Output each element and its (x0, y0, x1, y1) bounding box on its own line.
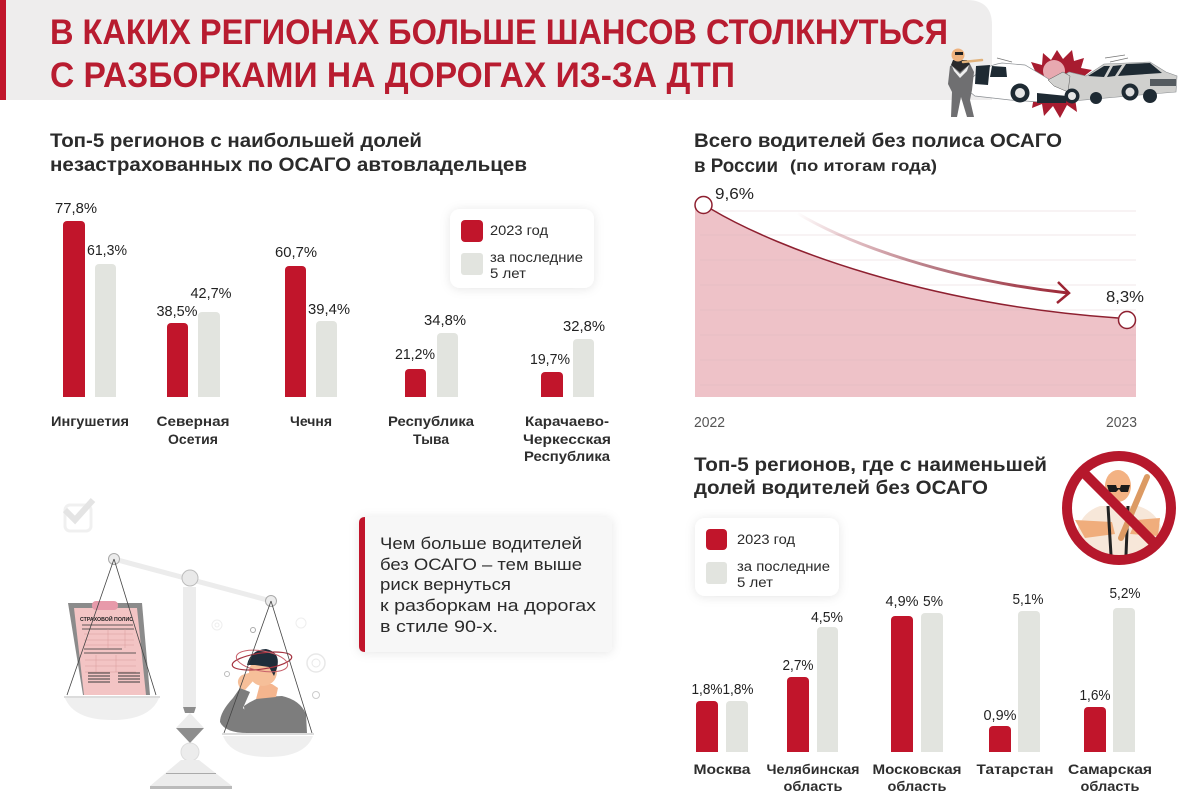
start point (695, 186, 754, 214)
area chart: 2023 (1106, 415, 1137, 431)
area chart (694, 186, 1144, 431)
right pan (222, 601, 314, 757)
legend: bottom chart: 2023 год (737, 532, 795, 547)
bars: Челябинская область: 2,7% (782, 658, 814, 674)
legend: top chart: 2023 год (490, 223, 548, 238)
heading: top-5 highest: Топ-5 регионов с наибольшей долей (50, 131, 422, 152)
bars: Московская область (872, 594, 962, 794)
heading: total drivers (694, 131, 1062, 177)
left pan (64, 559, 160, 720)
bars: Северная Осетия: Осетия (168, 431, 218, 447)
trend arrow (797, 213, 1069, 303)
bars: Самарская область: 5,2% (1110, 586, 1141, 602)
bars: Москва: Москва (694, 761, 751, 777)
header banner (0, 0, 992, 100)
bars: Челябинская область: Челябинская (766, 761, 860, 777)
bars: Самарская область: Самарская (1068, 761, 1152, 777)
bars: Республика Тыва: Республика (388, 413, 474, 429)
end point: 8,3% (1106, 289, 1144, 306)
legend: top chart: за последние (490, 250, 583, 265)
scales stand (108, 554, 276, 789)
bars: Северная Осетия: 38,5% (156, 304, 198, 320)
bars: Республика Тыва: 34,8% (424, 313, 466, 329)
bars: Ингушетия (51, 201, 129, 429)
bars: Самарская область (1068, 586, 1152, 794)
callout (359, 517, 612, 652)
bars: Москва: 1,8% (692, 682, 723, 698)
icon: prohibited bandit (1067, 456, 1171, 560)
man with bat (948, 48, 982, 117)
title: С РАЗБОРКАМИ НА ДОРОГАХ ИЗ-ЗА ДТП (50, 56, 735, 95)
area chart: 2022 (694, 415, 725, 431)
dizzy man (212, 618, 325, 733)
bars: Татарстан: Татарстан (976, 761, 1054, 777)
bars: Ингушетия: 77,8% (55, 201, 97, 217)
bars: Северная Осетия (156, 286, 232, 447)
callout: к разборкам на дорогах (380, 596, 597, 615)
callout: без ОСАГО – тем выше (380, 555, 582, 574)
bars: Самарская область: область (1080, 778, 1140, 794)
callout: риск вернуться (380, 575, 511, 594)
bars: Республика Тыва (388, 313, 474, 447)
bars: Карачаево-Черкесская Республика: 32,8% (563, 319, 605, 335)
bars: Карачаево-Черкесская Республика (523, 319, 611, 464)
heading: top-5 lowest: долей водителей без ОСАГО (694, 478, 988, 499)
bars: Чечня (275, 245, 350, 429)
bars: Московская область: 4,9% (886, 594, 919, 610)
title (50, 13, 948, 95)
heading: total drivers: (по итогам года) (790, 158, 937, 175)
bars: Самарская область: 1,6% (1080, 688, 1111, 704)
heading: top-5 lowest (694, 455, 1047, 499)
heading: top-5 highest (50, 131, 527, 176)
bars: Ингушетия: Ингушетия (51, 413, 129, 429)
bars: Республика Тыва: 21,2% (395, 347, 435, 363)
bars: Карачаево-Черкесская Республика: 19,7% (530, 352, 570, 368)
bars: Татарстан: 0,9% (984, 708, 1017, 724)
legend: bottom chart: 5 лет (737, 575, 773, 590)
bars: Ингушетия: 61,3% (87, 243, 127, 259)
heading: total drivers: в России (694, 156, 778, 177)
bars: Республика Тыва: Тыва (413, 431, 449, 447)
bars: Татарстан (976, 592, 1054, 777)
icon: checkbox (65, 500, 93, 531)
bars: Москва: 1,8% (722, 682, 754, 698)
illustration: scales (64, 554, 325, 789)
heading: top-5 lowest: Топ-5 регионов, где с наименьшей (694, 455, 1047, 476)
heading: total drivers: Всего водителей без полиса ОСАГО (694, 131, 1062, 152)
bars: Челябинская область: область (784, 778, 843, 794)
bars: Московская область: область (888, 778, 947, 794)
legend: top chart (450, 209, 594, 288)
title: В КАКИХ РЕГИОНАХ БОЛЬШЕ ШАНСОВ СТОЛКНУТЬСЯ (50, 13, 948, 52)
insurance policy document: СТРАХОВОЙ ПОЛИС (80, 615, 133, 623)
callout: в стиле 90-х. (380, 617, 498, 636)
start point: 9,6% (715, 186, 754, 203)
bars: Чечня: Чечня (290, 413, 332, 429)
bars: Татарстан: 5,1% (1012, 592, 1044, 608)
bars: Москва (692, 682, 754, 777)
bars: Карачаево-Черкесская Республика: Карачаево- (525, 413, 609, 429)
heading: top-5 highest: незастрахованных по ОСАГО автовладельцев (50, 155, 527, 176)
bars: Челябинская область (766, 610, 860, 794)
bars: Челябинская область: 4,5% (811, 610, 843, 626)
bars: Московская область: 5% (923, 594, 943, 610)
end point (1106, 289, 1144, 328)
bars: Северная Осетия: Северная (156, 413, 230, 429)
bar chart: lowest share (692, 586, 1152, 794)
legend: bottom chart (695, 518, 839, 596)
icon: car crash with man (948, 48, 1177, 118)
callout: Чем больше водителей (380, 534, 582, 553)
bars: Чечня: 39,4% (308, 302, 350, 318)
insurance policy document (68, 601, 150, 695)
bars: Северная Осетия: 42,7% (190, 286, 232, 302)
legend: top chart: 5 лет (490, 266, 526, 281)
bars: Московская область: Московская (872, 761, 962, 777)
bars: Чечня: 60,7% (275, 245, 317, 261)
bars: Карачаево-Черкесская Республика: Черкесская (523, 431, 611, 447)
bars: Карачаево-Черкесская Республика: Республика (524, 448, 610, 464)
legend: bottom chart: за последние (737, 559, 830, 574)
bar chart: highest share (51, 201, 611, 464)
